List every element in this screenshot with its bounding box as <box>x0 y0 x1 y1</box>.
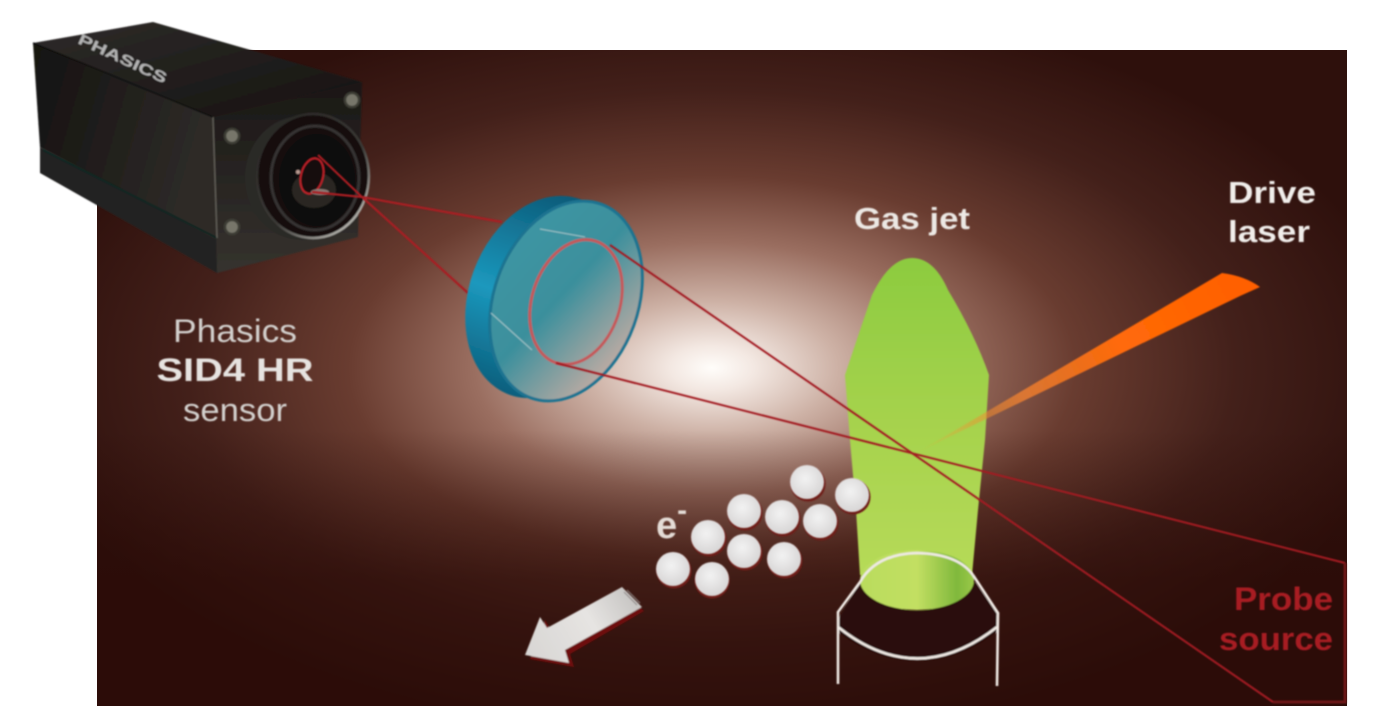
label: sensor: Phasics <box>173 313 297 349</box>
label: drive laser <box>1228 175 1316 249</box>
electron label: e <box>656 505 677 547</box>
electron label: - <box>677 494 687 527</box>
camera body <box>33 22 362 273</box>
nozzle <box>838 550 998 686</box>
lens glass <box>463 180 669 422</box>
camera screws <box>225 93 359 234</box>
arrow: electron direction <box>525 587 644 667</box>
camera logo: PHASICS <box>75 31 169 87</box>
electron shadows <box>656 466 870 598</box>
electron bunch <box>656 465 870 598</box>
focusing lens <box>438 173 669 422</box>
gas jet <box>845 258 989 575</box>
label: drive laser: laser <box>1228 214 1310 249</box>
label: drive laser: Drive <box>1228 175 1316 210</box>
label: sensor <box>156 313 314 428</box>
label: probe source: source <box>1219 621 1333 657</box>
electrons <box>656 465 869 596</box>
label: probe source: Probe <box>1234 581 1333 617</box>
probe beam to source <box>556 245 1345 702</box>
lens rim <box>438 173 652 421</box>
label: sensor: SID4 HR <box>156 352 314 388</box>
probe beam behind lens <box>312 155 502 293</box>
camera: Phasics sensor <box>33 22 369 273</box>
label: sensor: sensor <box>183 392 287 428</box>
lens highlights <box>491 229 585 350</box>
label: probe source <box>1219 581 1333 657</box>
beam footprint on lens <box>514 228 638 376</box>
camera lens <box>245 114 369 240</box>
drive laser beam <box>920 273 1260 451</box>
label: gas jet: Gas jet <box>854 201 970 236</box>
